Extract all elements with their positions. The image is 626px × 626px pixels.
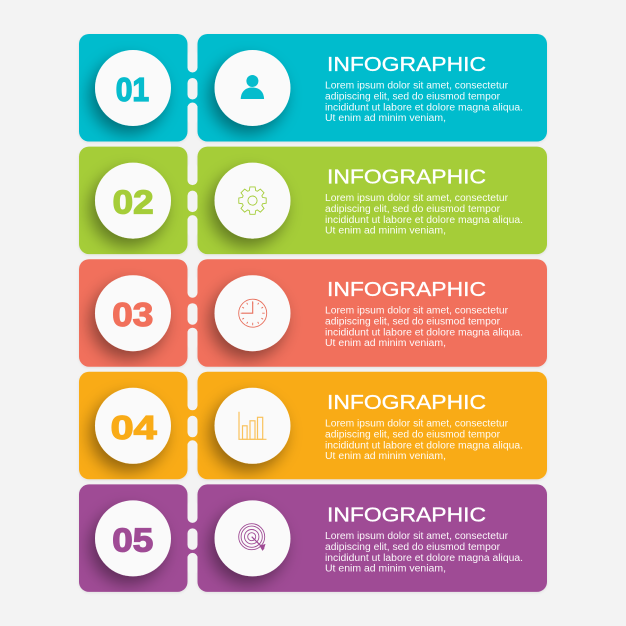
- icon: clock: [239, 299, 267, 327]
- number 02: 02: [113, 184, 154, 221]
- icon: target: [239, 524, 266, 551]
- number circle: row 5: [95, 500, 171, 576]
- number circle: row 4: [95, 388, 171, 464]
- body text: row 3: Ut enim ad minim veniam,: [325, 338, 446, 349]
- panels: row 3: [79, 259, 547, 367]
- body text: row 5: incididunt ut labore et dolore magna aliqua.: [325, 553, 523, 564]
- row 3: [79, 259, 547, 367]
- body text: row 1: Lorem ipsum dolor sit amet, consectetur: [325, 80, 509, 92]
- body text: row 4: incididunt ut labore et dolore magna aliqua.: [325, 440, 523, 451]
- body text: row 2: Ut enim ad minim veniam,: [325, 226, 446, 237]
- row 1: [79, 34, 547, 142]
- icon circle: row 4: [214, 388, 290, 464]
- icon circle: row 1: [214, 50, 290, 126]
- panels: row 5: [79, 484, 547, 592]
- heading: row 1: INFOGRAPHIC: [327, 54, 486, 76]
- row 4: [79, 372, 547, 479]
- icon circle: row 3: [214, 275, 290, 351]
- number 04: 04: [111, 409, 157, 446]
- icon: gear: [239, 187, 266, 214]
- body text: row 2: Lorem ipsum dolor sit amet, consectetur: [325, 193, 509, 204]
- body text: row 4: Lorem ipsum dolor sit amet, consectetur: [325, 418, 509, 429]
- panels: row 1: [79, 34, 547, 142]
- body text: row 3: [325, 306, 523, 349]
- body text: row 4: [325, 418, 523, 462]
- heading: row 4: INFOGRAPHIC: [327, 392, 486, 414]
- body text: row 1: adipiscing elit, sed do eiusmod tempor: [325, 92, 501, 102]
- row 2: [79, 147, 547, 254]
- number 05: 05: [112, 521, 153, 558]
- body text: row 3: adipiscing elit, sed do eiusmod tempor: [325, 317, 501, 328]
- body text: row 4: Ut enim ad minim veniam,: [325, 451, 446, 462]
- body text: row 2: incididunt ut labore et dolore magna aliqua.: [325, 215, 523, 226]
- heading: row 5: INFOGRAPHIC: [327, 504, 486, 526]
- connector slots: row 5: [188, 500, 198, 575]
- number 03: 03: [112, 296, 153, 333]
- icon: person: [241, 75, 264, 99]
- icon circle: row 2: [214, 163, 290, 239]
- number 01: 01: [116, 71, 149, 108]
- body text: row 5: Ut enim ad minim veniam,: [325, 563, 446, 574]
- number circle: row 1: [95, 50, 171, 126]
- connector slots: row 2: [188, 163, 198, 237]
- heading: row 2: INFOGRAPHIC: [327, 167, 486, 189]
- connector slots: row 4: [188, 388, 198, 462]
- number circle: row 2: [95, 163, 171, 239]
- body text: row 2: adipiscing elit, sed do eiusmod tempor: [325, 204, 501, 215]
- body text: row 1: [325, 80, 523, 124]
- panels: row 2: [79, 147, 547, 254]
- body text: row 3: Lorem ipsum dolor sit amet, consectetur: [325, 306, 509, 317]
- heading: row 3: INFOGRAPHIC: [327, 279, 486, 301]
- icon circle: row 5: [214, 500, 290, 576]
- body text: row 5: [325, 531, 523, 574]
- body text: row 2: [325, 193, 523, 237]
- panels: row 4: [79, 372, 547, 479]
- body text: row 1: incididunt ut labore et dolore magna aliqua.: [325, 102, 523, 114]
- body text: row 3: incididunt ut labore et dolore magna aliqua.: [325, 328, 523, 339]
- icon: bar chart: [239, 412, 266, 439]
- connector slots: row 3: [188, 275, 198, 350]
- number circle: row 3: [95, 275, 171, 351]
- body text: row 5: adipiscing elit, sed do eiusmod tempor: [325, 542, 501, 553]
- body text: row 4: adipiscing elit, sed do eiusmod tempor: [325, 429, 501, 440]
- connector slots: row 1: [188, 50, 198, 124]
- body text: row 5: Lorem ipsum dolor sit amet, consectetur: [325, 531, 509, 542]
- row 5: [79, 484, 547, 592]
- body text: row 1: Ut enim ad minim veniam,: [325, 113, 446, 124]
